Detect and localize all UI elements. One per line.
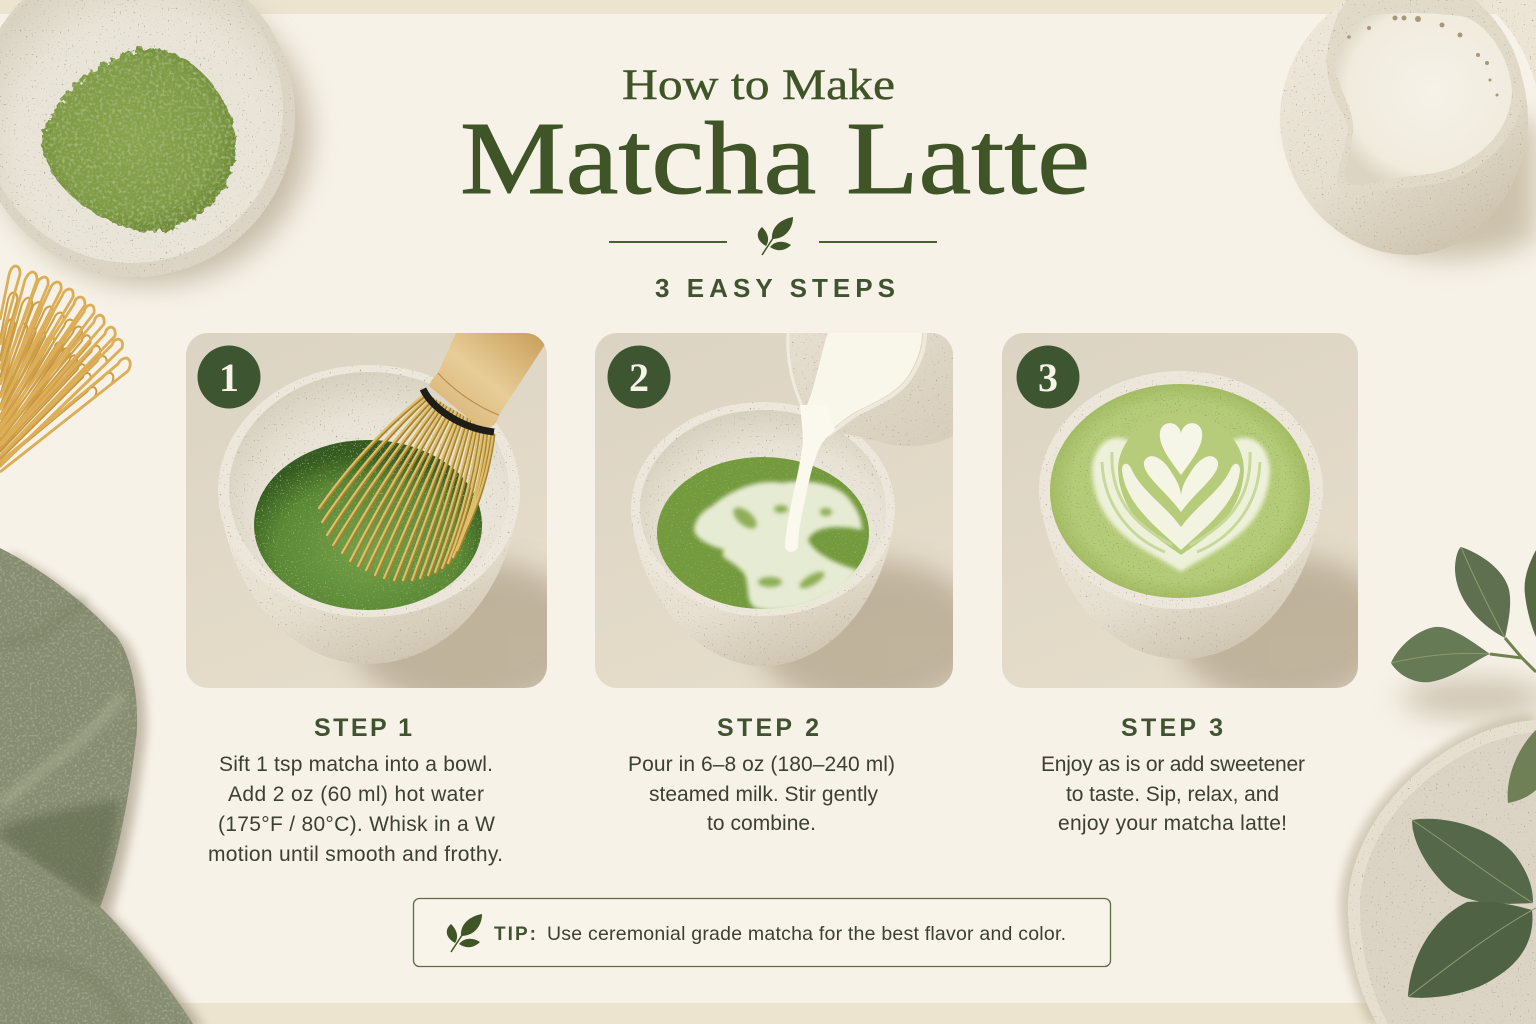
description: to taste. Sip, relax, and — [1066, 783, 1279, 806]
stem — [1490, 638, 1536, 672]
plate leaf lower — [1408, 902, 1533, 998]
pitcher body — [1280, 0, 1528, 255]
step 1 text — [208, 714, 503, 866]
heading: STEP 3 — [1121, 714, 1223, 742]
heading: STEP 1 — [314, 714, 412, 742]
panel: step 3 photo — [1002, 333, 1358, 688]
bowl — [631, 515, 895, 666]
green swirls in milk — [730, 504, 832, 591]
step 2 text — [628, 714, 895, 835]
callout: tip — [414, 898, 1110, 966]
badge: number 1: 1 — [219, 355, 239, 400]
description: Pour in 6–8 oz (180–240 ml) — [628, 753, 895, 776]
matcha liquid — [254, 440, 482, 610]
bowl of matcha powder — [0, 0, 310, 285]
heading: STEP 2 — [717, 714, 819, 742]
leaf — [1455, 547, 1510, 638]
green sprig, right — [1391, 547, 1536, 718]
description: Sift 1 tsp matcha into a bowl. — [219, 753, 493, 776]
description: Enjoy as is or add sweetener — [1041, 753, 1305, 776]
milk — [1335, 13, 1512, 185]
bamboo whisk, left — [0, 266, 130, 472]
matcha powder — [42, 48, 236, 232]
bowl — [224, 528, 512, 664]
title — [460, 62, 1090, 216]
milk pitcher, top right — [1280, 0, 1536, 259]
tip text: Use ceremonial grade matcha for the best flavor and color. — [547, 923, 1066, 945]
milk in pitcher — [804, 333, 922, 433]
step 3 text — [1041, 714, 1305, 835]
panel: step 2 photo — [595, 333, 953, 688]
green linen cloth — [0, 548, 205, 1024]
whisk handle — [429, 333, 545, 428]
badge: number 2 — [608, 346, 670, 408]
divider with leaf — [609, 217, 937, 255]
icon: leaf — [758, 217, 793, 255]
whisk binding — [423, 389, 494, 432]
leaf — [1391, 627, 1490, 682]
description: Add 2 oz (60 ml) hot water — [228, 783, 484, 806]
second ceramic at top right corner — [1480, 0, 1536, 85]
badge: number 3 — [1016, 346, 1080, 408]
matcha and milk liquid — [657, 457, 869, 609]
leaf — [1525, 550, 1536, 637]
plate leaf top — [1412, 819, 1533, 904]
description: to combine. — [707, 812, 816, 835]
pitcher rim — [1327, 0, 1523, 196]
badge: number 2: 2 — [629, 355, 649, 400]
bowl — [1045, 519, 1319, 659]
plate inner — [1360, 732, 1536, 1024]
plate leaf edge — [1508, 730, 1536, 803]
description: (175°F / 80°C). Whisk in a W — [218, 813, 495, 836]
description — [628, 753, 895, 835]
description: motion until smooth and frothy. — [208, 843, 503, 866]
description — [1041, 753, 1305, 835]
subtitle: 3 EASY STEPS — [655, 273, 895, 303]
title line 1: How to Make — [622, 62, 895, 109]
milk stream — [785, 405, 835, 552]
latte surface — [1050, 384, 1310, 598]
whisk tines — [319, 394, 494, 581]
plate rim — [1348, 720, 1536, 1024]
description: steamed milk. Stir gently — [649, 783, 878, 806]
panel: step 1 photo — [186, 333, 547, 688]
description — [208, 753, 503, 866]
tip label: TIP: — [494, 924, 536, 945]
badge: number 3: 3 — [1038, 355, 1058, 400]
ceramic plate with leaves, bottom right — [1340, 715, 1536, 1024]
title line 2: Matcha Latte — [460, 101, 1090, 216]
milk foam dots — [1347, 16, 1498, 96]
badge: number 1 — [198, 346, 260, 408]
latte art — [1092, 412, 1270, 572]
description: enjoy your matcha latte! — [1058, 812, 1287, 835]
icon: leaf — [447, 914, 482, 952]
pitcher — [787, 333, 953, 446]
